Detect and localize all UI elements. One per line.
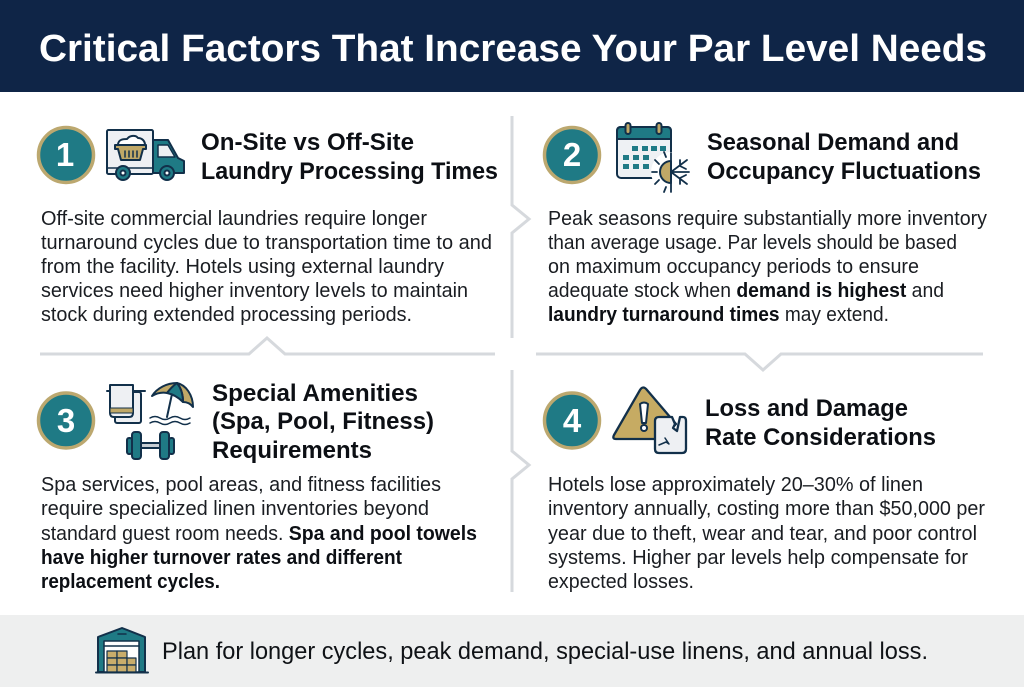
icon: warning triangle and torn linen <box>613 388 686 453</box>
heading 1: Laundry Processing Times <box>201 158 498 185</box>
body text 4: inventory annually, costing more than $50,000 per <box>548 498 985 520</box>
body text 2 <box>548 208 987 326</box>
body text 1 <box>41 208 492 326</box>
body text 1: turnaround cycles due to transportation time to and <box>41 232 492 254</box>
body text 4: year due to theft, wear and tear, and poor control <box>548 523 977 545</box>
footer text: Plan for longer cycles, peak demand, special-use linens, and annual loss. <box>162 638 928 665</box>
number badge 4 <box>544 393 600 448</box>
heading 1: On-Site vs Off-Site <box>201 129 414 156</box>
heading 2: Seasonal Demand and <box>707 129 959 156</box>
body text 1: stock during extended processing periods. <box>41 304 412 326</box>
heading 3: (Spa, Pool, Fitness) <box>212 408 434 435</box>
body text 3: Spa services, pool areas, and fitness facilities <box>41 474 441 496</box>
heading 3 <box>212 380 434 464</box>
body text 2: Peak seasons require substantially more inventory <box>548 208 987 230</box>
number badge 2: 2 <box>563 136 581 173</box>
heading 2 <box>707 129 981 185</box>
body text 2: than average usage. Par levels should be based <box>548 232 957 254</box>
body text 2: on maximum occupancy periods to ensure <box>548 256 919 278</box>
panel: on-site vs off-site laundry <box>38 128 498 326</box>
body text 4 <box>548 474 985 593</box>
body text 3: standard guest room needs. Spa and pool towels <box>41 523 477 545</box>
heading 2: Occupancy Fluctuations <box>707 158 981 185</box>
number badge 2 <box>544 128 600 182</box>
body text 1: Off-site commercial laundries require longer <box>41 208 427 230</box>
heading 3: Special Amenities <box>212 380 418 407</box>
number badge 4: 4 <box>563 402 582 439</box>
icon: warehouse <box>96 628 148 672</box>
body text 3: require specialized linen inventories beyond <box>41 498 429 520</box>
body text 3 <box>41 474 477 593</box>
body text 2: adequate stock when demand is highest and <box>548 280 944 302</box>
body text 3: have higher turnover rates and different <box>41 547 402 569</box>
body text 1: services need higher inventory levels to maintain <box>41 280 468 302</box>
heading 3: Requirements <box>212 437 372 464</box>
title banner: Critical Factors That Increase Your Par Level Needs <box>39 28 987 70</box>
heading 4: Loss and Damage <box>705 395 908 422</box>
panel: special amenities <box>38 380 477 593</box>
panel: loss and damage <box>544 388 985 593</box>
body text 4: systems. Higher par levels help compensate for <box>548 547 968 569</box>
icon: towel, umbrella and dumbbell <box>107 383 193 459</box>
heading 4: Rate Considerations <box>705 424 936 451</box>
body text 2: laundry turnaround times may extend. <box>548 304 889 326</box>
title banner <box>0 0 1024 92</box>
number badge 1: 1 <box>56 136 74 173</box>
number badge 3 <box>38 393 94 448</box>
body text 3: replacement cycles. <box>41 571 220 593</box>
number badge 3: 3 <box>57 402 75 439</box>
body text 4: Hotels lose approximately 20–30% of linen <box>548 474 923 496</box>
footer bar <box>0 615 1024 687</box>
body text 1: from the facility. Hotels using external laundry <box>41 256 444 278</box>
icon: calendar and sun snowflake <box>617 123 691 192</box>
icon: laundry truck <box>107 130 184 180</box>
heading 4 <box>705 395 936 451</box>
panel: seasonal demand <box>544 123 987 326</box>
body text 4: expected losses. <box>548 571 694 593</box>
number badge 1 <box>38 128 94 182</box>
heading 1 <box>201 129 498 185</box>
